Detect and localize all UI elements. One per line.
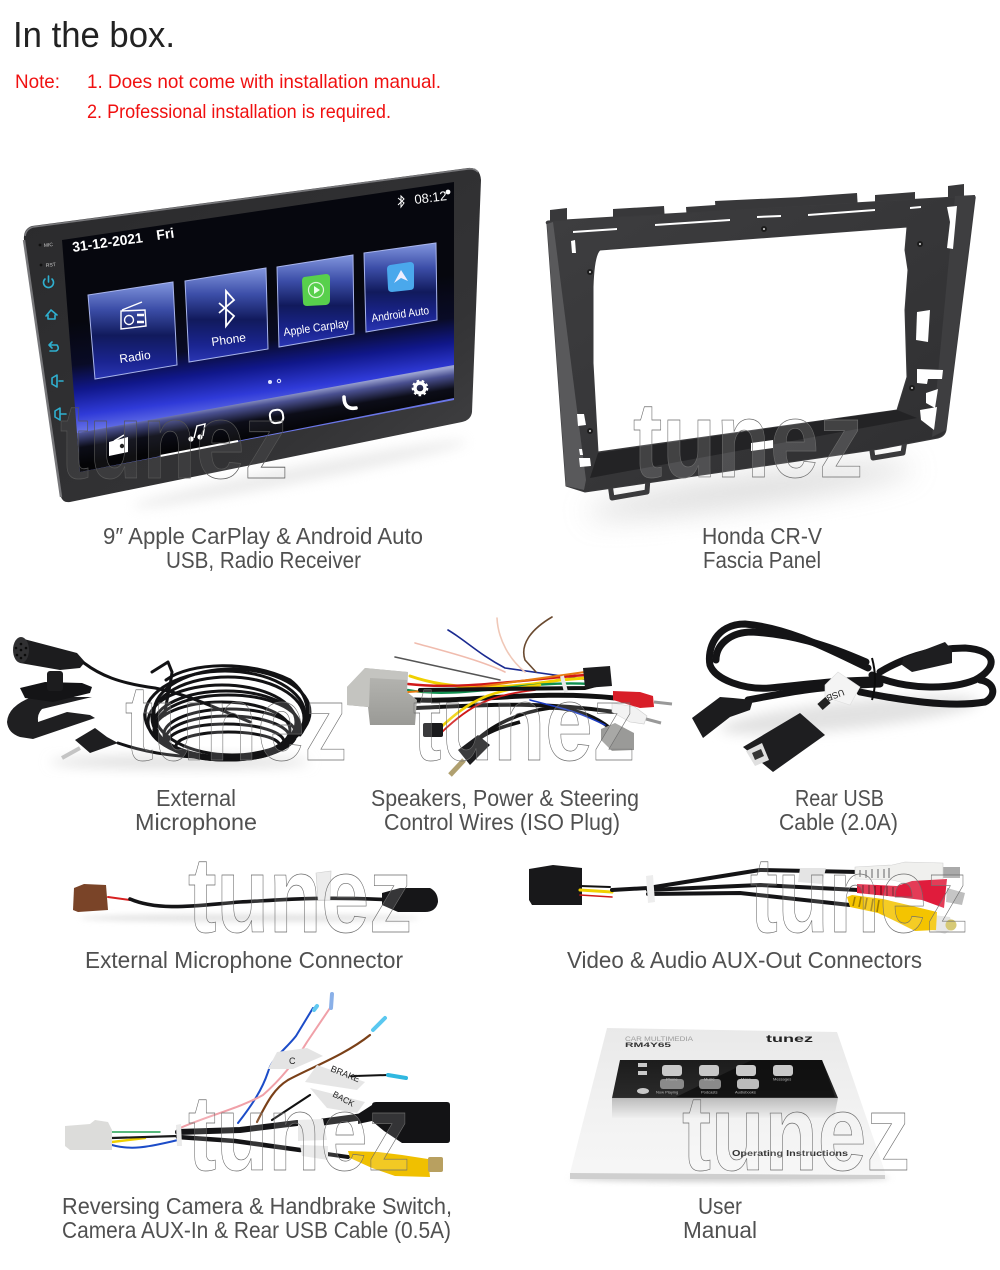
app icons (637, 1063, 793, 1094)
USB label: USB (825, 687, 846, 703)
grey ISO connector (347, 668, 417, 725)
title: In the box. (13, 14, 175, 55)
side buttons: RST (46, 262, 56, 269)
dock bar (77, 365, 454, 472)
watermark: tunez (125, 662, 347, 783)
cable loops (709, 624, 993, 704)
installation note: 1. Does not come with installation manual. (87, 71, 441, 93)
app labels: Maps (741, 1076, 751, 1082)
installation note: Note: (15, 71, 60, 93)
caption: head unit: 9″ Apple CarPlay & Android Auto (103, 523, 423, 549)
small connector (692, 697, 753, 738)
watermark: tunez (413, 662, 635, 783)
status text: 31-12-2021 (71, 229, 144, 255)
side buttons: MIC (44, 242, 54, 249)
caption: wires: Speakers, Power & Steering (371, 785, 639, 811)
cover text: tunez (766, 1034, 813, 1045)
label flags (268, 1048, 365, 1113)
manual page (570, 1028, 885, 1179)
caption: fascia: Fascia Panel (703, 547, 821, 573)
product screen image (612, 1060, 838, 1118)
panel: fascia (546, 184, 975, 527)
caption: reversing: Camera AUX-In & Rear USB Cable (0.5A) (62, 1217, 451, 1243)
fascia outer rim (547, 222, 586, 490)
watermark: tunez (60, 380, 288, 501)
small black connector (423, 723, 443, 737)
grey small connector (601, 723, 634, 751)
slits and cut-outs (571, 206, 957, 467)
microphone cable coil (84, 662, 310, 760)
red RCA plug (857, 879, 965, 908)
tile: phone (185, 268, 268, 362)
panel: external microphone (7, 637, 347, 783)
brake and reverse tips (314, 994, 406, 1078)
tile: android auto (364, 243, 437, 332)
panel: video and audio aux connectors (529, 834, 968, 955)
tile: apple carplay (277, 255, 354, 347)
caption: reversing: Reversing Camera & Handbrake Switch, (62, 1193, 452, 1219)
microphone head (13, 637, 85, 670)
head unit bezel (24, 168, 481, 502)
caption: manual: Manual (683, 1217, 757, 1243)
caption: rear USB (779, 785, 898, 835)
caption: microphone: External (156, 785, 236, 811)
yellow RCA plug (348, 1151, 443, 1177)
ferrite core (902, 642, 952, 672)
caption: microphone: Microphone (135, 809, 257, 835)
white connector (65, 1120, 112, 1150)
top tabs (550, 184, 964, 226)
panel: rear USB cable (692, 624, 993, 772)
label flags: C (289, 1056, 296, 1066)
tile: apple carplay: Apple Carplay (283, 318, 350, 339)
caption: microphone (135, 785, 257, 835)
label flags: BACK (331, 1089, 356, 1109)
label flags: BRAKE (329, 1064, 361, 1084)
3.5mm jack (62, 728, 118, 758)
panel: head unit (24, 168, 481, 514)
USB plug (358, 1102, 450, 1143)
wire bundle (408, 672, 615, 745)
cover text (625, 1034, 813, 1049)
app labels: Now Playing (656, 1090, 678, 1094)
panel: external microphone connector (73, 834, 438, 955)
caption: manual: User (698, 1193, 742, 1219)
page dots (268, 379, 281, 384)
thin wires (112, 1008, 388, 1148)
microphone connector cable (108, 897, 392, 907)
tile: android auto: Android Auto (371, 305, 430, 325)
app labels: Phone (666, 1076, 678, 1082)
screen (62, 182, 454, 472)
white RCA plug (855, 862, 960, 883)
black block connector (529, 865, 582, 905)
caption: rear USB: Cable (2.0A) (779, 809, 898, 835)
caption: mic connector: External Microphone Connector (85, 947, 403, 973)
caption: wires (371, 785, 639, 835)
side buttons (39, 242, 66, 420)
app labels (656, 1076, 791, 1094)
caption: aux: Video & Audio AUX-Out Connectors (567, 947, 922, 973)
status text (71, 188, 450, 255)
cover text: RM4Y65 (625, 1043, 672, 1049)
watermark: tunez (188, 834, 412, 955)
dock icons (109, 381, 427, 456)
yellow RCA plug (847, 895, 956, 934)
installation note: 2. Professional installation is required. (87, 101, 391, 123)
end black connector (583, 666, 612, 688)
caption: head unit: USB, Radio Receiver (166, 547, 361, 573)
microphone clip (7, 671, 95, 739)
fascia frame (546, 196, 975, 492)
app labels: Podcasts (701, 1090, 717, 1094)
caption: reversing (62, 1193, 452, 1243)
tile: radio (88, 282, 177, 379)
cable tie (562, 676, 566, 692)
wires (580, 870, 858, 905)
RCA plugs (612, 691, 672, 724)
tile: phone: Phone (210, 330, 247, 349)
app labels: Audiobooks (735, 1090, 756, 1094)
screw holes (588, 227, 922, 433)
black main cable (178, 1117, 360, 1157)
tile: radio: Radio (118, 348, 152, 366)
caption: fascia (702, 523, 822, 573)
USB female plug (743, 700, 828, 772)
caption: manual (683, 1193, 757, 1243)
operating instructions text: Operating Instructions (732, 1149, 849, 1158)
caption: rear USB: Rear USB (795, 785, 884, 811)
app labels: Messages (773, 1076, 791, 1082)
loose wires (395, 617, 590, 680)
caption: head unit (103, 523, 423, 573)
status text: 08:12 (414, 188, 448, 207)
watermark: tunez (682, 1072, 910, 1193)
antenna plug (450, 722, 520, 775)
bottom tabs (610, 440, 905, 498)
watermark: tunez (633, 379, 863, 500)
app labels: Music (704, 1076, 714, 1082)
USB label (825, 672, 860, 705)
caption: fascia: Honda CR-V (702, 523, 822, 549)
panel: speaker and power wires (347, 617, 672, 783)
installation note (15, 71, 441, 123)
watermark: tunez (188, 1072, 410, 1193)
caption: wires: Control Wires (ISO Plug) (384, 809, 620, 835)
panel: reversing camera harness (65, 994, 450, 1193)
cover text: CAR MULTIMEDIA (625, 1037, 693, 1043)
panel: user manual (570, 1028, 910, 1193)
status text: Fri (155, 225, 175, 243)
